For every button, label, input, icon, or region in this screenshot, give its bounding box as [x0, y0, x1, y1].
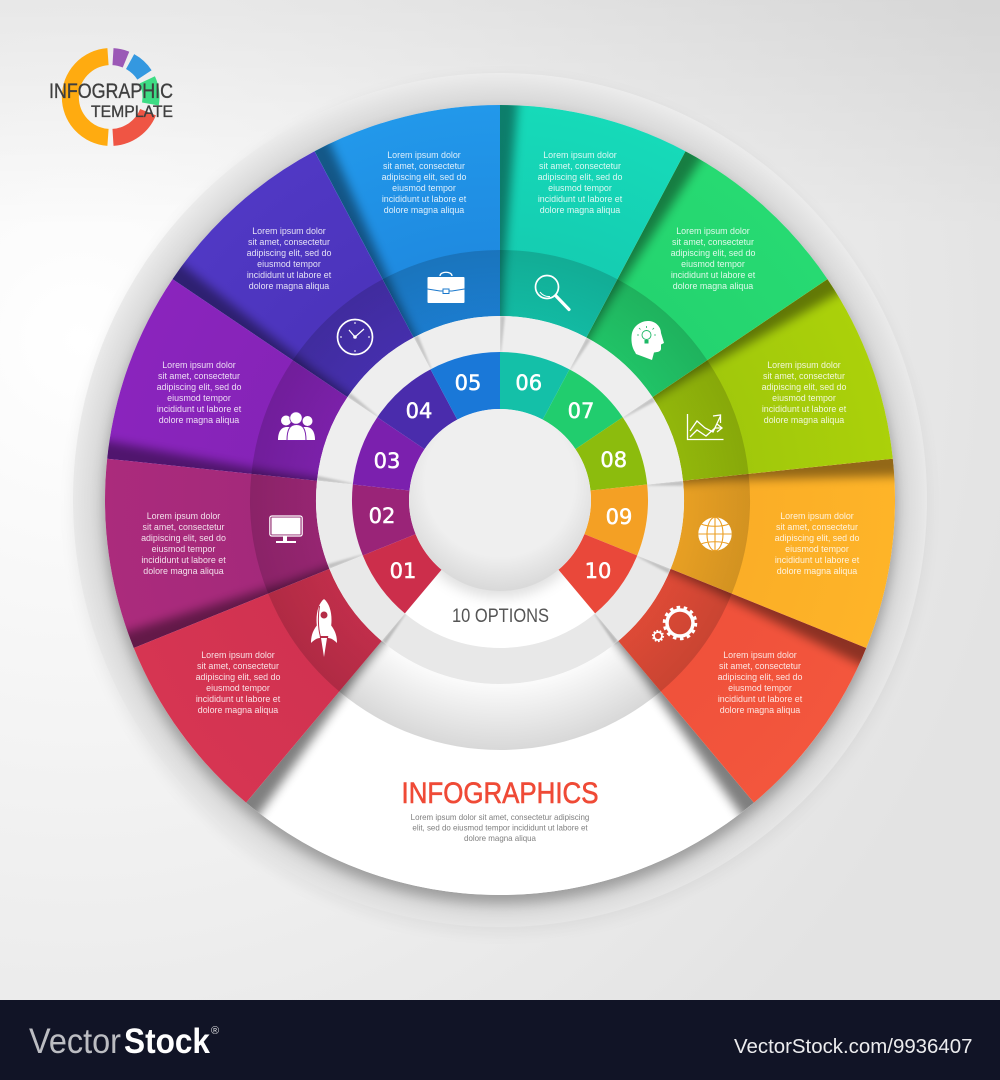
- numbers 01 to 10: 01: [390, 559, 416, 583]
- text: option 04: incididunt ut labore et: [247, 270, 332, 280]
- numbers 01 to 10: 08: [600, 448, 627, 472]
- panel: option 01: [104, 442, 448, 803]
- panel: option 02: [105, 458, 416, 648]
- heading: infographics: INFOGRAPHICS: [402, 777, 598, 810]
- brand wordmark: Stock: [124, 1022, 210, 1061]
- text: option 03: dolore magna aliqua: [159, 415, 239, 425]
- text: option 02: Lorem ipsum dolor: [147, 511, 220, 521]
- brand wordmark: Vector: [29, 1022, 121, 1061]
- brand wordmark: [29, 1022, 219, 1061]
- numbers 01 to 10: 09: [606, 505, 632, 529]
- icon: gears: [653, 608, 696, 641]
- text: option 04: eiusmod tempor: [257, 259, 321, 269]
- text: option 09: sit amet, consectetur: [776, 522, 858, 532]
- text: option 08: Lorem ipsum dolor: [767, 360, 841, 370]
- text: option 03: Lorem ipsum dolor: [162, 360, 236, 370]
- text: option 07: dolore magna aliqua: [673, 281, 753, 291]
- panel: option 09: [584, 458, 895, 648]
- panel: white bottom sector: [246, 570, 754, 895]
- text: option 04: adipiscing elit, sed do: [247, 248, 331, 258]
- icon: line chart: [688, 414, 724, 440]
- text: option 04: sit amet, consectetur: [248, 237, 330, 247]
- panel: option 10: [558, 534, 866, 802]
- text: option 10: sit amet, consectetur: [719, 661, 801, 671]
- panel: option 04: [172, 151, 458, 449]
- text: option 06: sit amet, consectetur: [539, 161, 621, 171]
- text: option 09: eiusmod tempor: [785, 544, 849, 554]
- text: option 05: sit amet, consectetur: [383, 161, 465, 171]
- panel: option 03: [107, 279, 424, 490]
- numbers 01 to 10: 05: [455, 371, 481, 395]
- text: option 05: adipiscing elit, sed do: [382, 172, 466, 182]
- text: option 06: adipiscing elit, sed do: [538, 172, 622, 182]
- text: option 04: Lorem ipsum dolor: [252, 226, 326, 236]
- text: option 07: Lorem ipsum dolor: [676, 226, 750, 236]
- text: option 07: eiusmod tempor: [681, 259, 745, 269]
- text: option 02: sit amet, consectetur: [143, 522, 224, 532]
- brand wordmark: ®: [211, 1025, 219, 1037]
- text: option 05: incididunt ut labore et: [382, 194, 467, 204]
- text: option 02: adipiscing elit, sed do: [141, 533, 226, 543]
- numbers 01 to 10: 06: [515, 371, 542, 395]
- text: option 01: eiusmod tempor: [206, 683, 270, 693]
- numbers 01 to 10: 03: [374, 449, 400, 473]
- text: option 10: Lorem ipsum dolor: [723, 650, 797, 660]
- text: option 01: incididunt ut labore et: [196, 694, 281, 704]
- numbers 01 to 10: 07: [568, 399, 594, 423]
- text: option 03: incididunt ut labore et: [157, 404, 242, 414]
- logo text: INFOGRAPHIC: [49, 80, 173, 103]
- logo: infographic template: [49, 57, 173, 137]
- text: option 04: dolore magna aliqua: [249, 281, 329, 291]
- text: option 03: sit amet, consectetur: [158, 371, 240, 381]
- text: option 09: adipiscing elit, sed do: [775, 533, 859, 543]
- center disc: [409, 409, 591, 591]
- text: option 09: dolore magna aliqua: [777, 566, 857, 576]
- text: option 07: adipiscing elit, sed do: [671, 248, 755, 258]
- text: option 07: sit amet, consectetur: [672, 237, 754, 247]
- icon: globe: [698, 517, 732, 551]
- icon: monitor: [270, 516, 302, 543]
- text: option 02: eiusmod tempor: [152, 544, 215, 554]
- icon: magnifier: [536, 276, 569, 310]
- panel: option 06: [500, 105, 686, 420]
- text: option 01: Lorem ipsum dolor: [201, 650, 275, 660]
- icon: clock: [338, 320, 372, 354]
- text: option 07: incididunt ut labore et: [671, 270, 756, 280]
- text: option 08: eiusmod tempor: [772, 393, 836, 403]
- text: option 06: Lorem ipsum dolor: [543, 150, 617, 160]
- text: option 06: incididunt ut labore et: [538, 194, 623, 204]
- text: infographics description: Lorem ipsum dolor sit amet, consectetur adipiscing: [411, 813, 589, 822]
- text: option 01: dolore magna aliqua: [198, 705, 278, 715]
- text: option 05: Lorem ipsum dolor: [387, 150, 461, 160]
- text: option 10: dolore magna aliqua: [720, 705, 800, 715]
- text: option 10: adipiscing elit, sed do: [718, 672, 802, 682]
- text: option 09: incididunt ut labore et: [775, 555, 860, 565]
- numbers 01 to 10: 10: [585, 559, 611, 583]
- text: option 10: incididunt ut labore et: [718, 694, 803, 704]
- text: infographics description: elit, sed do eiusmod tempor incididunt ut labore et: [412, 824, 588, 832]
- text: option 01: adipiscing elit, sed do: [196, 672, 280, 682]
- logo ring: [70, 57, 151, 137]
- text: option 02: incididunt ut labore et: [141, 555, 226, 565]
- text: option 09: Lorem ipsum dolor: [780, 511, 854, 521]
- text: option 10: eiusmod tempor: [728, 683, 792, 693]
- text: option 08: adipiscing elit, sed do: [762, 382, 846, 392]
- text: option 08: incididunt ut labore et: [762, 404, 847, 414]
- logo text: [49, 80, 173, 121]
- logo text: TEMPLATE: [91, 103, 173, 121]
- panel: option 08: [576, 279, 893, 490]
- numbers 01 to 10: 04: [406, 399, 432, 423]
- panel: option 05: [314, 105, 500, 420]
- text: option 03: adipiscing elit, sed do: [157, 382, 241, 392]
- text: option 05: eiusmod tempor: [392, 183, 456, 193]
- text: option 08: sit amet, consectetur: [763, 371, 845, 381]
- label: 10 options: 10 OPTIONS: [452, 606, 549, 627]
- icon: head with lightbulb: [631, 321, 664, 360]
- text: option 02: dolore magna aliqua: [143, 566, 224, 576]
- footer id text: VectorStock.com/9936407: [734, 1036, 972, 1058]
- outer ring: [71, 73, 929, 934]
- panel: option 07: [542, 151, 828, 449]
- footer band: [0, 1000, 1000, 1080]
- icon: briefcase: [428, 272, 464, 303]
- numbers 01 to 10: [369, 371, 632, 583]
- text: option 08: dolore magna aliqua: [764, 415, 844, 425]
- text: option 03: eiusmod tempor: [167, 393, 231, 403]
- icon: people: [278, 412, 315, 440]
- text: option 01: sit amet, consectetur: [197, 661, 279, 671]
- text: option 06: dolore magna aliqua: [540, 205, 620, 215]
- text: option 05: dolore magna aliqua: [384, 205, 464, 215]
- text: option 06: eiusmod tempor: [548, 183, 612, 193]
- numbers 01 to 10: 02: [369, 504, 395, 528]
- icon: rocket: [311, 599, 337, 657]
- text: infographics description: dolore magna aliqua: [464, 834, 537, 843]
